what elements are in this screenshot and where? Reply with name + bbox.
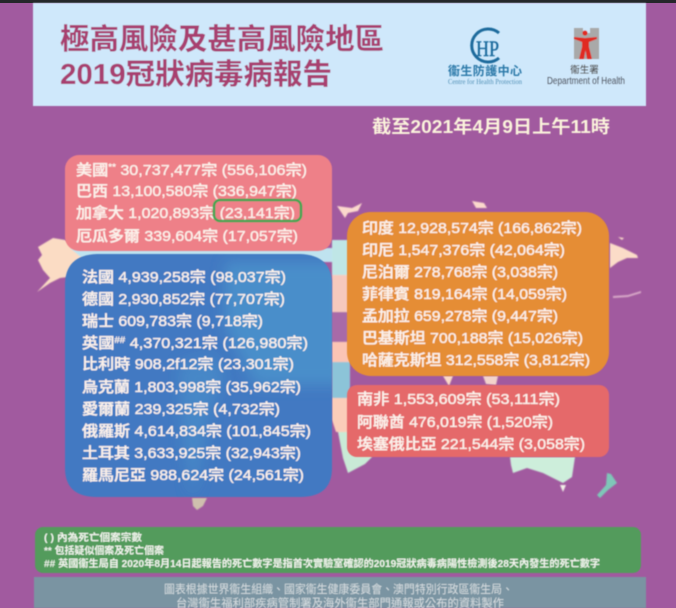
panel: Americas high risk (red): 加拿大 1,020,893宗 (23,141宗): [76, 204, 295, 222]
panel: Africa and Middle East (coral): [347, 385, 609, 457]
panel: Europe (blue): 德國 2,930,852宗 (77,707宗): [82, 290, 285, 308]
panel: source note (grey): [34, 577, 646, 608]
panel: Americas high risk (red): **: [108, 162, 116, 172]
panel: Asia (orange): 印尼 1,547,376宗 (42,064宗): [362, 241, 565, 259]
panel: Asia (orange): 尼泊爾 278,768宗 (3,038宗): [362, 263, 558, 281]
header panel: [33, 3, 646, 106]
panel: Asia (orange): 孟加拉 659,278宗 (9,447宗): [362, 307, 558, 325]
logo: Department of Health: Department of Health: [547, 76, 625, 87]
panel: Europe (blue): 愛爾蘭 239,325宗 (4,732宗): [82, 400, 280, 418]
panel: source note (grey): 圖表根據世界衞生組織、國家衞生健康委員會、澳門特別行政區衞生局、: [164, 582, 513, 596]
panel: Europe (blue): 英國: [82, 335, 112, 352]
logo: Centre for Health Protection: 衞生防護中心: [448, 63, 522, 78]
title: 極高風險及甚高風險地區: [60, 23, 384, 56]
panel: Asia (orange): 哈薩克斯坦 312,558宗 (3,812宗): [362, 351, 590, 369]
panel: footnotes (green): ** 包括疑似個案及死亡個案: [44, 544, 164, 557]
title: [60, 23, 384, 91]
panel: Europe (blue): 瑞士 609,783宗 (9,718宗): [82, 312, 263, 330]
panel: Americas high risk (red): 美國: [76, 162, 106, 179]
panel: Europe (blue): 土耳其 3,633,925宗 (32,943宗): [82, 444, 301, 462]
panel: Africa and Middle East (coral): 阿聯酋 476,019宗 (1,520宗): [357, 413, 553, 431]
logo: Department of Health: 衞生署: [570, 64, 599, 76]
panel: Europe (blue): 法國 4,939,258宗 (98,037宗): [82, 268, 286, 286]
panel: Asia (orange): [347, 212, 609, 376]
panel: Europe (blue): 比利時 908,2f12宗 (23,301宗): [82, 355, 294, 373]
highlight box: [214, 200, 301, 221]
panel: Africa and Middle East (coral): 南非 1,553,609宗 (53,111宗): [357, 390, 560, 408]
panel: footnotes (green): ( ) 內為死亡個案宗數: [44, 531, 142, 544]
logo: Department of Health: [547, 28, 625, 87]
logo: Centre for Health Protection: Centre for Health Protection: [448, 78, 522, 86]
panel: Americas high risk (red): 30,737,477宗 (556,106宗): [116, 161, 307, 179]
panel: footnotes (green): ## 英國衞生局自 2020年8月14日起報告的死亡數字是指首次實驗室確認的2019冠狀病毒病陽性檢測後28天內發生的死亡數字: [44, 557, 600, 570]
logo: Centre for Health Protection: [448, 29, 522, 86]
panel: Americas high risk (red): 厄瓜多爾 339,604宗 (17,057宗): [76, 227, 298, 245]
panel: Europe (blue): 羅馬尼亞 988,624宗 (24,561宗): [82, 466, 304, 484]
panel: Europe (blue): 烏克蘭 1,803,998宗 (35,962宗): [82, 378, 301, 396]
title: 2019冠狀病毒病報告: [60, 58, 332, 91]
date stamp: 截至2021年4月9日上午11時: [372, 116, 610, 137]
logo: Centre for Health Protection: HP: [476, 36, 499, 61]
panel: Europe (blue): ##: [114, 335, 125, 345]
panel: Europe (blue): 4,370,321宗 (126,980宗): [125, 334, 308, 352]
panel: Americas high risk (red): 巴西 13,100,580宗 (336,947宗): [76, 182, 297, 200]
panel: Africa and Middle East (coral): 埃塞俄比亞 221,544宗 (3,058宗): [357, 435, 585, 453]
panel: Europe (blue): [65, 254, 345, 497]
panel: Asia (orange): 菲律賓 819,164宗 (14,059宗): [362, 285, 567, 303]
panel: Americas high risk (red): [65, 155, 332, 251]
panel: Asia (orange): 巴基斯坦 700,188宗 (15,026宗): [362, 329, 583, 347]
panel: Europe (blue): 俄羅斯 4,614,834宗 (101,845宗): [82, 422, 311, 440]
panel: Asia (orange): 印度 12,928,574宗 (166,862宗): [362, 219, 582, 237]
panel: footnotes (green): [35, 527, 641, 573]
world map background: [37, 201, 641, 510]
